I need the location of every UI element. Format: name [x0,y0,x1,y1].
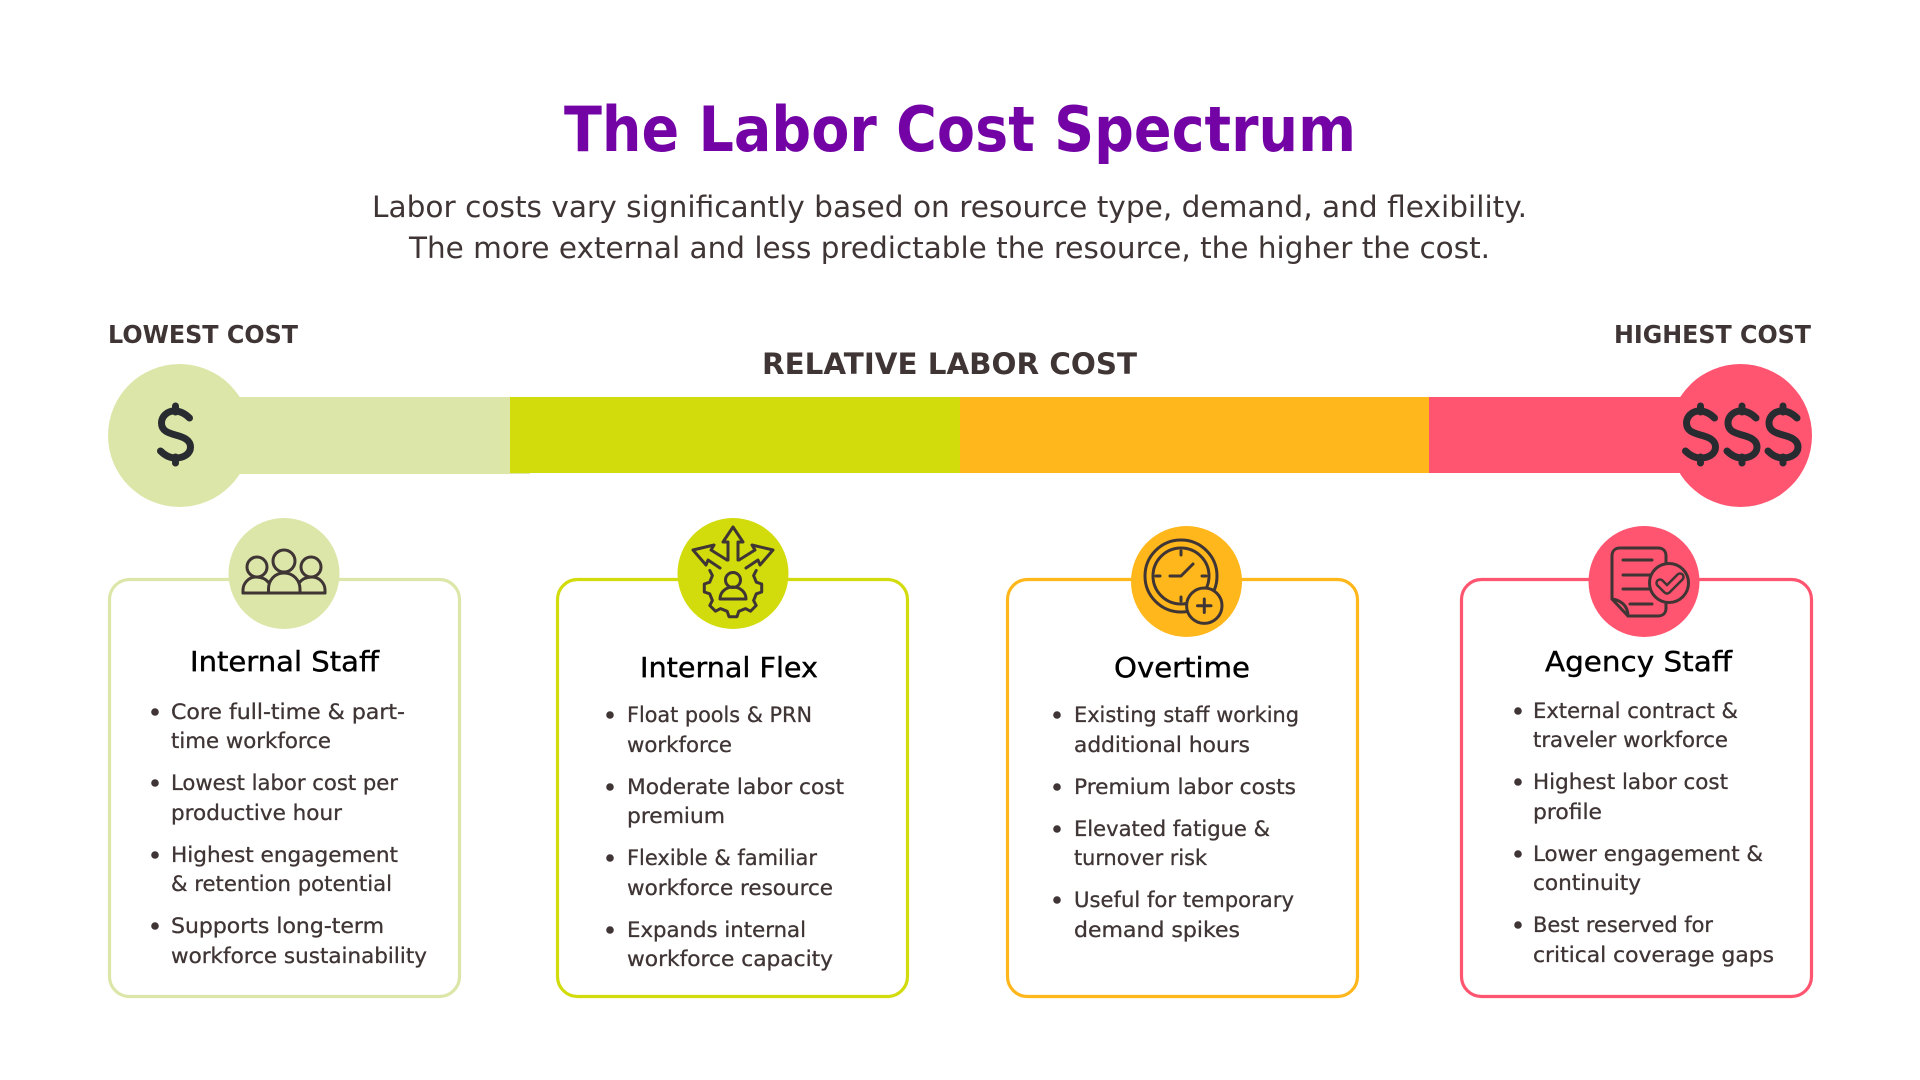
endpoint circle: high cost [1669,364,1812,507]
bullet list [606,703,844,971]
icon: triple dollar [1686,406,1798,463]
bullet list: Expands internal [627,918,806,942]
label: relative labor cost: RELATIVE LABOR COST [762,347,1137,381]
label: highest cost: HIGHEST COST [1614,320,1811,349]
bullet list: Highest engagement [171,843,398,867]
bullet list: Core full-time & part- [171,700,405,724]
bullet list: workforce sustainability [171,944,427,968]
segment: highest [1429,397,1741,473]
bullet list: Supports long-term [171,914,384,938]
bullet list: & retention potential [171,872,392,896]
icon: clock with plus [1131,526,1242,637]
icon: single dollar [160,406,190,463]
bullet list: continuity [1533,871,1641,895]
segment: lowest [180,397,530,474]
bullet list: time workforce [171,729,331,753]
panel: internal staff [110,518,460,996]
bullet list: Highest labor cost [1533,770,1728,794]
panel: internal flex [558,518,908,996]
title: The Labor Cost Spectrum [564,93,1356,166]
bullet list: workforce resource [627,876,833,900]
card border [1462,580,1812,996]
bullet list: premium [627,804,725,828]
segment: moderate [510,397,960,473]
heading: Overtime [1114,652,1250,684]
subtitle [372,190,1527,265]
bullet list: profile [1533,800,1602,824]
bullet list: Float pools & PRN [627,703,812,727]
bullet list [1053,703,1299,942]
bullet list: Elevated fatigue & [1074,817,1270,841]
cost spectrum bar [108,364,1812,507]
label: lowest cost: LOWEST COST [108,320,298,349]
card border [110,580,460,996]
bullet list: Lowest labor cost per [171,771,398,795]
bullet list: Useful for temporary [1074,888,1294,912]
bullet list: External contract & [1533,699,1738,723]
bullet list: traveler workforce [1533,728,1728,752]
bullet list: Flexible & familiar [627,846,817,870]
heading: Internal Flex [640,652,818,684]
bullet list [1514,699,1774,967]
bullet list: workforce capacity [627,947,833,971]
subtitle: Labor costs vary significantly based on resource type, demand, and flexibility. [372,190,1527,224]
panel: overtime [1008,526,1358,996]
heading: Agency Staff [1545,646,1733,678]
card border [558,580,908,996]
bullet list: demand spikes [1074,918,1240,942]
bullet list [151,700,427,968]
segment: high [960,397,1429,473]
bullet list: critical coverage gaps [1533,943,1774,967]
subtitle: The more external and less predictable the resource, the higher the cost. [408,231,1490,265]
bullet list: Lower engagement & [1533,842,1763,866]
bullet list: Premium labor costs [1074,775,1296,799]
card border [1008,580,1358,996]
bullet list: turnover risk [1074,846,1208,870]
bullet list: Moderate labor cost [627,775,844,799]
panel: agency staff [1462,526,1812,996]
bullet list: productive hour [171,801,342,825]
icon: people group [228,518,340,629]
icon: document with check [1588,526,1700,637]
heading: Internal Staff [190,646,380,678]
bullet list: workforce [627,733,732,757]
bullet list: Existing staff working [1074,703,1299,727]
bullet list: additional hours [1074,733,1250,757]
icon: gear with arrows [678,518,788,629]
bullet list: Best reserved for [1533,913,1713,937]
endpoint circle: low cost [108,364,251,507]
